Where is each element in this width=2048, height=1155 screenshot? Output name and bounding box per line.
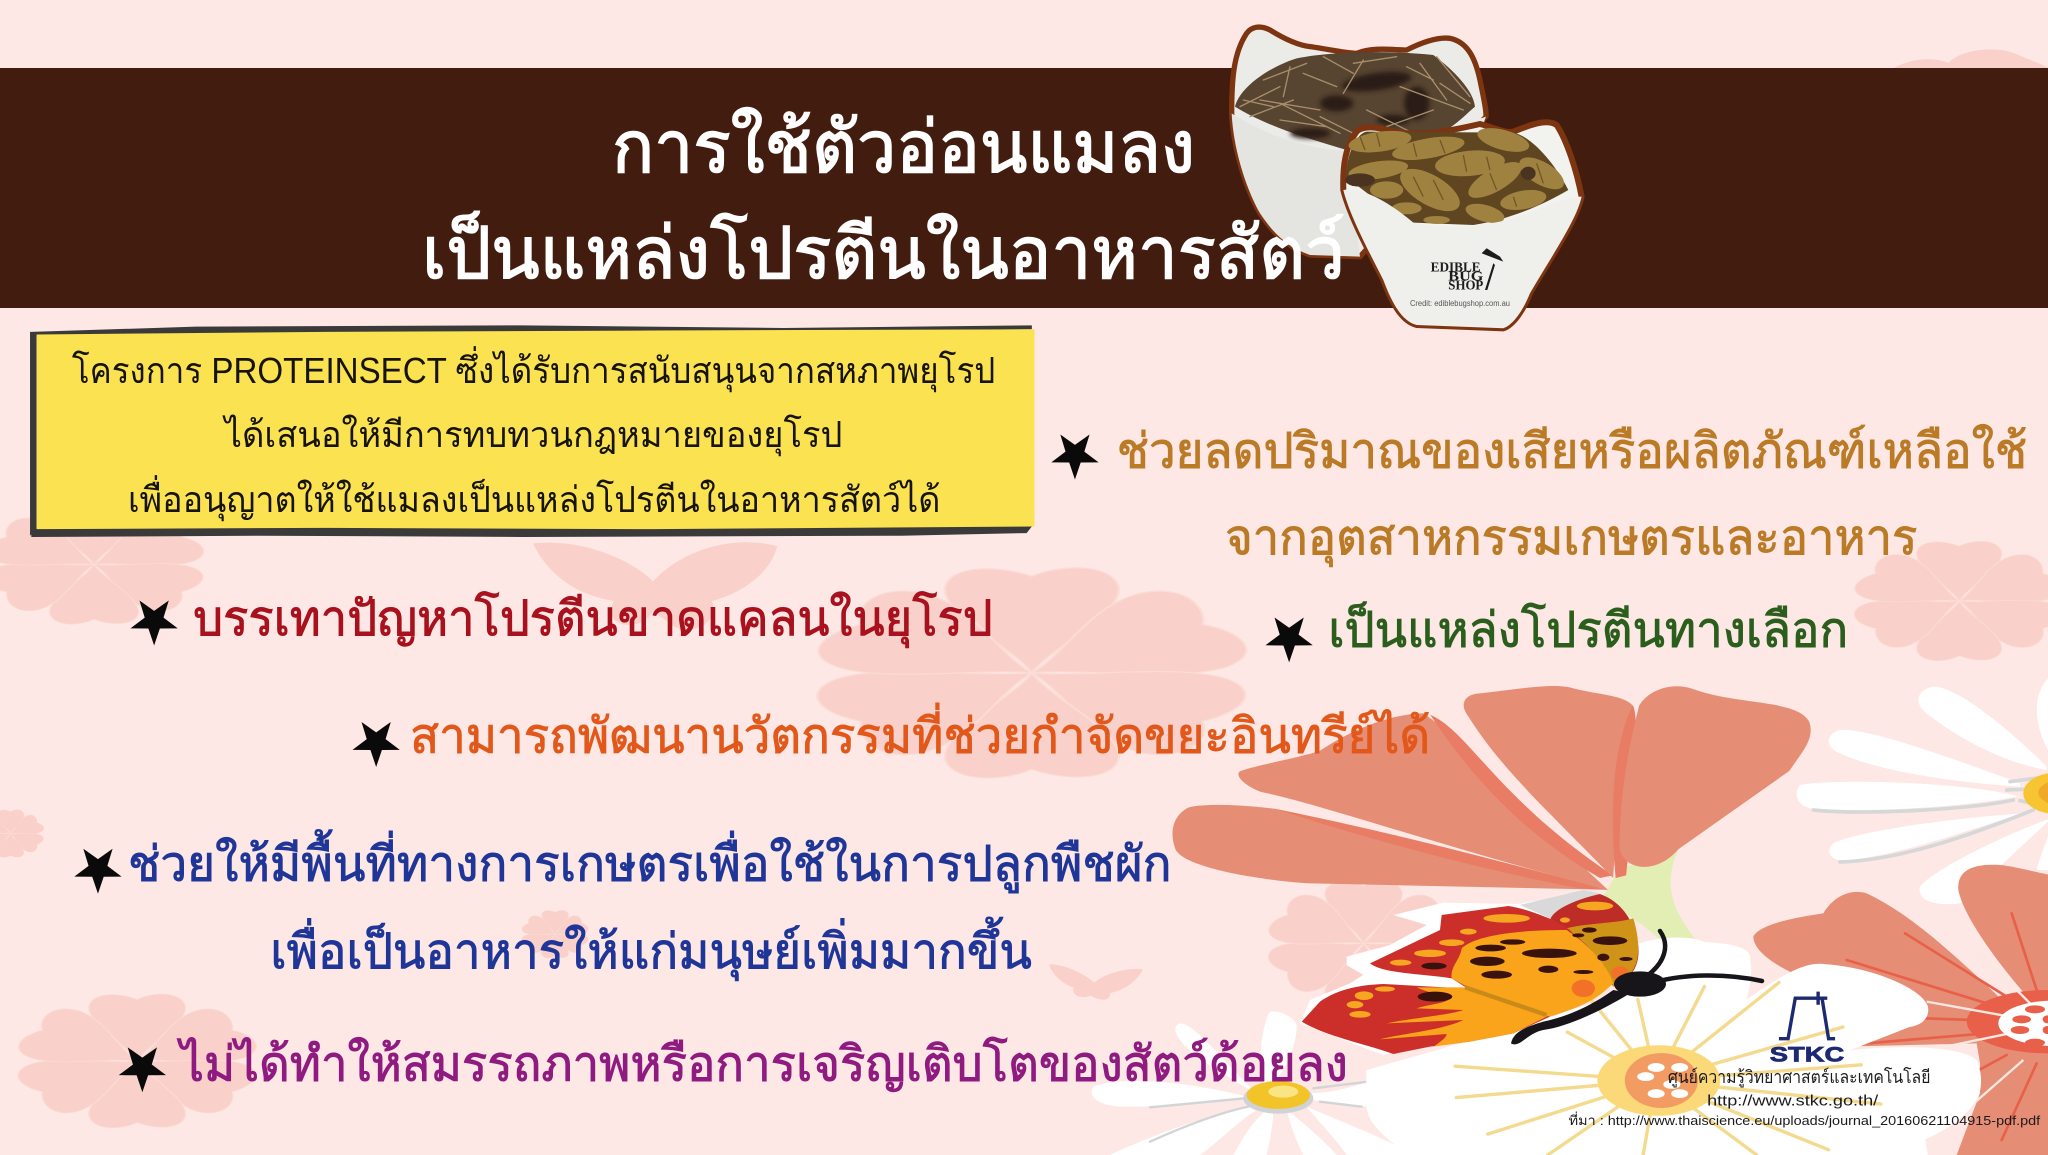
benefit: farmland: เพื่อเป็นอาหารให้แก่มนุษย์เพิ่มมากขึ้น [270,917,1032,981]
yellow note box: เพื่ออนุญาตให้ใช้แมลงเป็นแหล่งโปรตีนในอาหารสัตว์ได้ [128,475,940,521]
yellow note box: ได้เสนอให้มีการทบทวนกฎหมายของยุโรป [222,414,842,456]
title: เป็นแหล่งโปรตีนในอาหารสัตว์ [422,211,1345,294]
butterfly [1300,890,1762,1055]
icon: STKC logo [1770,992,1844,1067]
source credits: http://www.stkc.go.th/ [1707,1093,1878,1109]
title [422,107,1345,294]
salmon flower at lower right [1753,865,2048,1155]
large salmon flower [1172,686,1811,939]
benefit: animal growth: ไม่ได้ทำให้สมรรถภาพหรือการเจริญเติบโตของสัตว์ด้อยลง [176,1037,1348,1092]
title: การใช้ตัวอ่อนแมลง [612,107,1195,188]
yellow note box [30,325,1034,537]
bowl logo [1431,248,1503,292]
STKC logo and source [1569,992,2041,1128]
small white daisy [1092,1011,1413,1155]
benefit: alternative protein: เป็นแหล่งโปรตีนทางเลือก [1328,602,1848,658]
bowl logo: BUG [1448,268,1483,283]
source credits: ศูนย์ความรู้วิทยาศาสตร์และเทคโนโลยี [1668,1067,1930,1088]
benefit: organic waste innovation: สามารถพัฒนานวัตกรรมที่ช่วยกำจัดขยะอินทรีย์ได้ [410,703,1430,764]
source credits: ที่มา : http://www.thaiscience.eu/uploads/journal_20160621104915-pdf.pdf [1569,1111,2041,1128]
bowl logo: EDIBLE [1431,260,1481,275]
bowl credit: Credit: ediblebugshop.com.au [1410,299,1510,308]
header band [0,68,2048,308]
benefit: farmland: ช่วยให้มีพื้นที่ทางการเกษตรเพื่อใช้ในการปลูกพืชผัก [128,830,1172,894]
source credits [1569,1067,2041,1128]
large white flower with yellow rays [1366,938,1981,1155]
white daisy at right edge [1797,677,2048,904]
content text [30,325,2041,1128]
icon: STKC logo: STKC [1770,1042,1844,1067]
back bowl with crickets [1232,27,1486,257]
benefit: protein shortage: บรรเทาปัญหาโปรตีนขาดแคลนในยุโรป [193,591,993,648]
benefit: reduce waste [1051,424,2027,567]
bowl logo: SHOP [1448,277,1483,292]
front bowl with silkworm pupae [1343,122,1582,328]
right-hand flowers [1753,677,2048,1155]
benefit: farmland [74,830,1172,981]
benefit: reduce waste: ช่วยลดปริมาณของเสียหรือผลิตภัณฑ์เหลือใช้ [1117,424,2027,479]
benefit: reduce waste: จากอุตสาหกรรมเกษตรและอาหาร [1225,511,1917,567]
yellow note box: โครงการ PROTEINSECT ซึ่งได้รับการสนับสนุนจากสหภาพยุโรป [72,346,995,392]
